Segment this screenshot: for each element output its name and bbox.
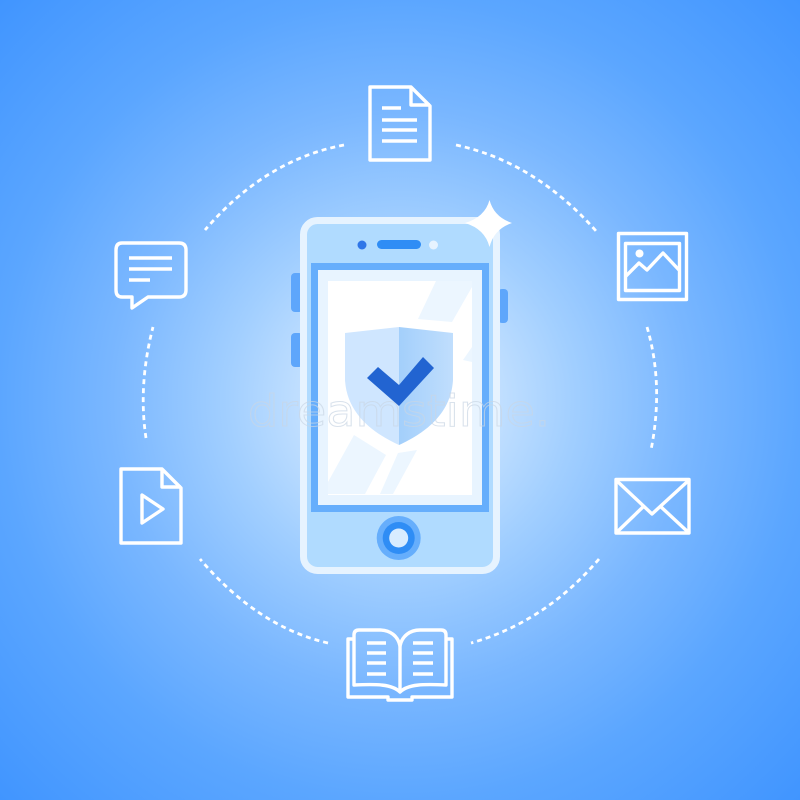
home button xyxy=(377,516,421,560)
icon: open book xyxy=(348,630,452,700)
speaker and sensors xyxy=(358,240,438,250)
icon: chat bubble xyxy=(116,243,186,308)
watermark: dreamstime. xyxy=(248,386,550,437)
security shield xyxy=(345,327,453,445)
icon: video file xyxy=(121,469,181,543)
icon: envelope xyxy=(616,480,689,533)
phone body xyxy=(304,220,496,570)
icon: document xyxy=(370,87,430,160)
sparkle star xyxy=(465,200,512,247)
dashed orbit ring xyxy=(143,145,657,643)
check mark xyxy=(367,357,434,406)
side buttons xyxy=(291,273,508,367)
icon: picture xyxy=(618,234,686,300)
screen xyxy=(311,263,489,512)
glass reflections xyxy=(328,281,472,494)
smartphone xyxy=(291,220,508,570)
